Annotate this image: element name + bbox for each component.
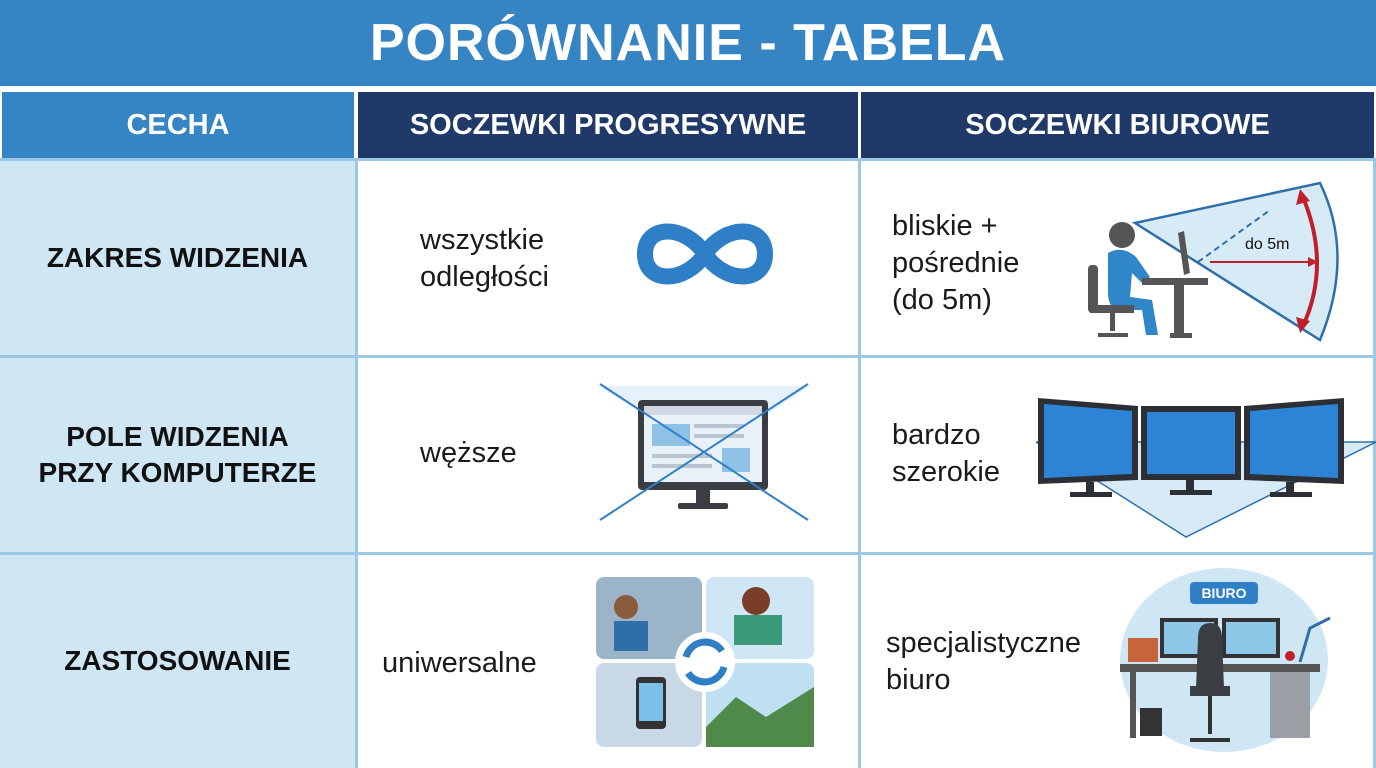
text: bardzo szerokie (892, 419, 1000, 488)
text: specjalistyczne biuro: specjalistyczne (886, 627, 1081, 659)
header: cecha (2, 92, 354, 158)
text: uniwersalne: uniwersalne (382, 647, 537, 679)
row label: zakres widzenia: ZAKRES WIDZENIA (47, 242, 308, 273)
header: progresywne: SOCZEWKI PROGRESYWNE (410, 108, 806, 140)
row label: pole widzenia: PRZY KOMPUTERZE (39, 457, 316, 488)
icon: desk vision range: do 5m (1245, 236, 1289, 253)
text: specjalistyczne biuro (886, 627, 1081, 696)
text: wszystkie odległości (420, 224, 549, 293)
row label: pole widzenia (0, 358, 355, 552)
row label: zastosowanie: ZASTOSOWANIE (64, 645, 291, 676)
icon: desk vision range (1088, 182, 1339, 342)
header: cecha: CECHA (126, 108, 230, 140)
row label: zastosowanie (0, 555, 355, 768)
text: bliskie + pośrednie: (do 5m) (892, 284, 992, 316)
text: bardzo szerokie: bardzo (892, 419, 981, 451)
row label: zakres widzenia (0, 161, 355, 355)
text: specjalistyczne biuro: biuro (886, 664, 950, 696)
text: bliskie + pośrednie (892, 210, 1019, 316)
text: bliskie + pośrednie: bliskie + (892, 210, 998, 242)
icon: office desk (1120, 568, 1331, 752)
text: wszystkie odległości: odległości (420, 261, 549, 293)
icon: narrow monitor (598, 383, 810, 521)
header: progresywne (358, 92, 858, 158)
row label: pole widzenia: POLE WIDZENIA (66, 421, 289, 452)
icon: three monitors (1036, 398, 1376, 538)
icon: infinity (637, 224, 773, 284)
title (0, 0, 1376, 86)
header: biurowe (861, 92, 1374, 158)
title: PORÓWNANIE - TABELA (370, 14, 1006, 72)
icon: office desk: BIURO (1201, 585, 1247, 601)
header: biurowe: SOCZEWKI BIUROWE (965, 108, 1270, 140)
text: wszystkie odległości: wszystkie (420, 224, 544, 256)
text: bliskie + pośrednie: pośrednie (892, 247, 1019, 279)
icon: usage collage (596, 577, 814, 747)
text: węższe: węższe (420, 437, 517, 469)
text: bardzo szerokie: szerokie (892, 456, 1000, 488)
